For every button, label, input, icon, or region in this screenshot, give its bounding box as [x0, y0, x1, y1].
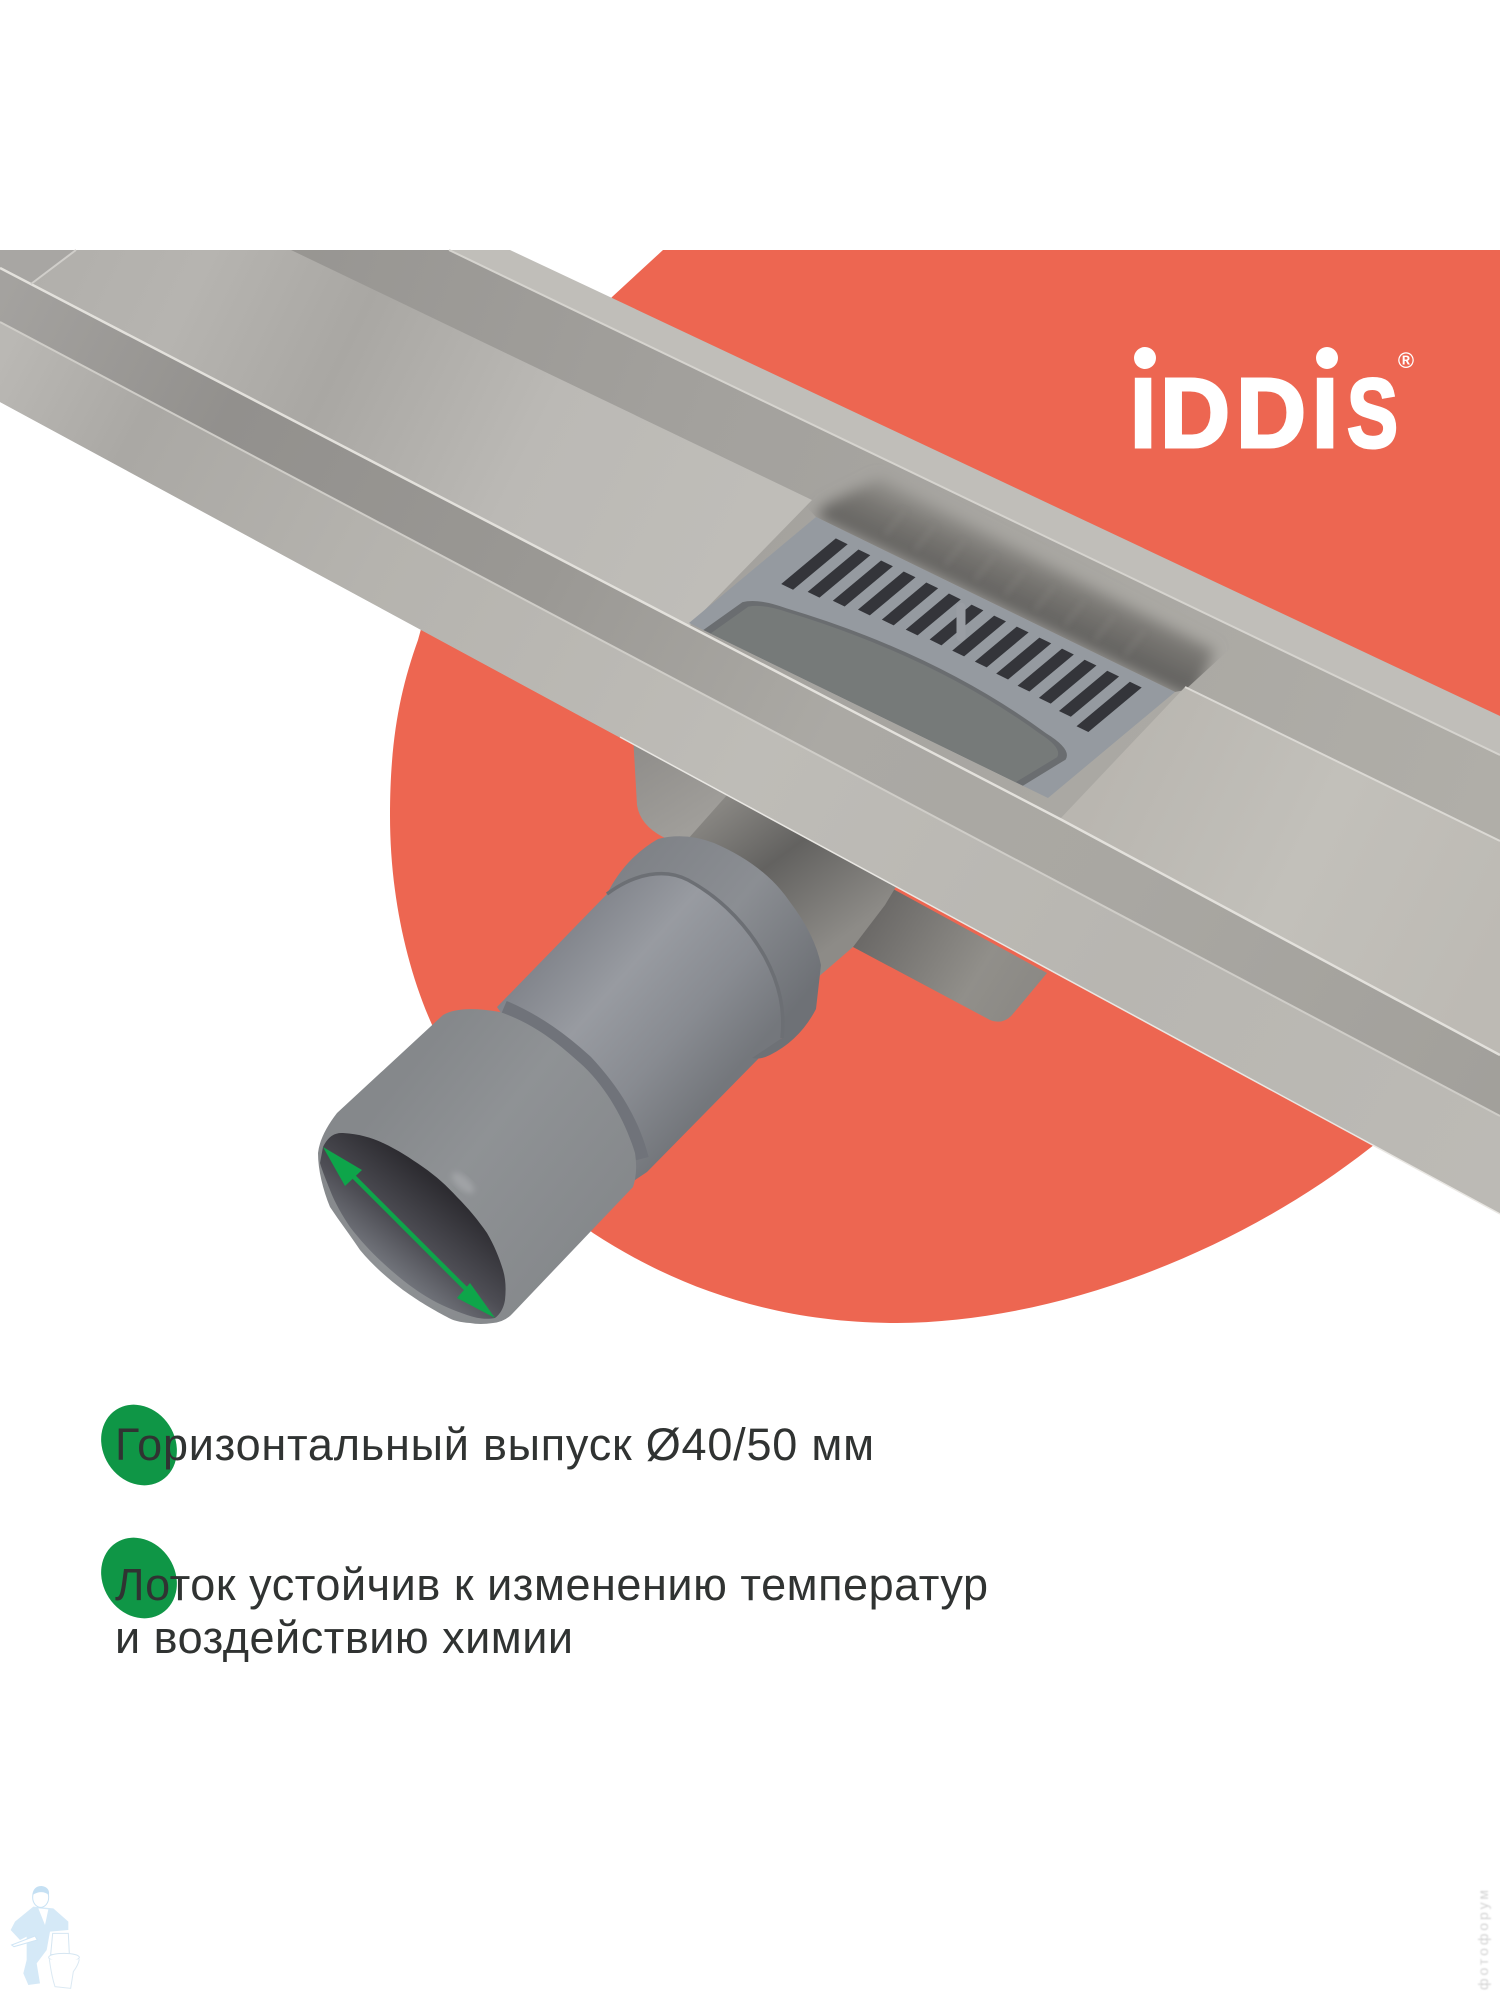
cover panel left	[31, 250, 812, 626]
recessed channel	[0, 250, 1500, 1055]
feature 1 text: Горизонтальный выпуск Ø40/50 мм	[115, 1419, 874, 1470]
grey outlet pipe	[318, 836, 821, 1324]
lower band	[0, 322, 1500, 1214]
logo wordmark: I	[1130, 359, 1156, 468]
pipe collar	[607, 836, 821, 1059]
feature 2 text	[115, 1559, 988, 1663]
diameter arrow	[323, 1147, 495, 1318]
feature 2 text: и воздействию химии	[115, 1612, 573, 1663]
grate frame	[689, 517, 1175, 798]
ridge band	[0, 268, 1500, 1116]
tray body and lip	[0, 250, 1500, 1214]
slotted plastic grate	[689, 517, 1175, 798]
stainless drain tray	[0, 250, 1500, 1214]
highlights	[0, 250, 1500, 1214]
dark recess behind grate	[816, 478, 1215, 700]
feature 1	[86, 1390, 874, 1500]
logo wordmark: D	[1236, 359, 1306, 468]
green blob 1	[86, 1390, 192, 1500]
logo wordmark	[1130, 358, 1398, 468]
cuff highlight	[449, 1169, 477, 1197]
feature 2 text: Лоток устойчив к изменению температур	[115, 1559, 988, 1610]
cover panel right	[1060, 687, 1500, 1055]
pipe cuff	[318, 1009, 636, 1324]
logo wordmark: D	[1160, 359, 1230, 468]
pipe middle tube	[497, 874, 783, 1190]
watermark: plumber with toilet	[11, 1886, 79, 1988]
logo wordmark: S	[1347, 358, 1398, 468]
cuff shoulder band	[502, 1012, 637, 1160]
grate pin	[956, 607, 966, 637]
logo	[1130, 347, 1414, 468]
registered mark: ®	[1398, 348, 1414, 373]
grate slots	[781, 538, 1142, 733]
logo wordmark: I	[1312, 359, 1338, 468]
feature 2	[86, 1523, 988, 1663]
watermark: vertical site text: фотофорум	[1475, 1890, 1491, 1990]
grate cover plate	[703, 581, 1088, 789]
left corner piece	[0, 250, 76, 284]
pipe mouth opening	[320, 1133, 506, 1319]
green blob 2	[86, 1523, 192, 1633]
drain box under the tray	[633, 735, 1047, 1022]
coral background blob	[390, 250, 1500, 1323]
logo dots	[1134, 347, 1156, 369]
